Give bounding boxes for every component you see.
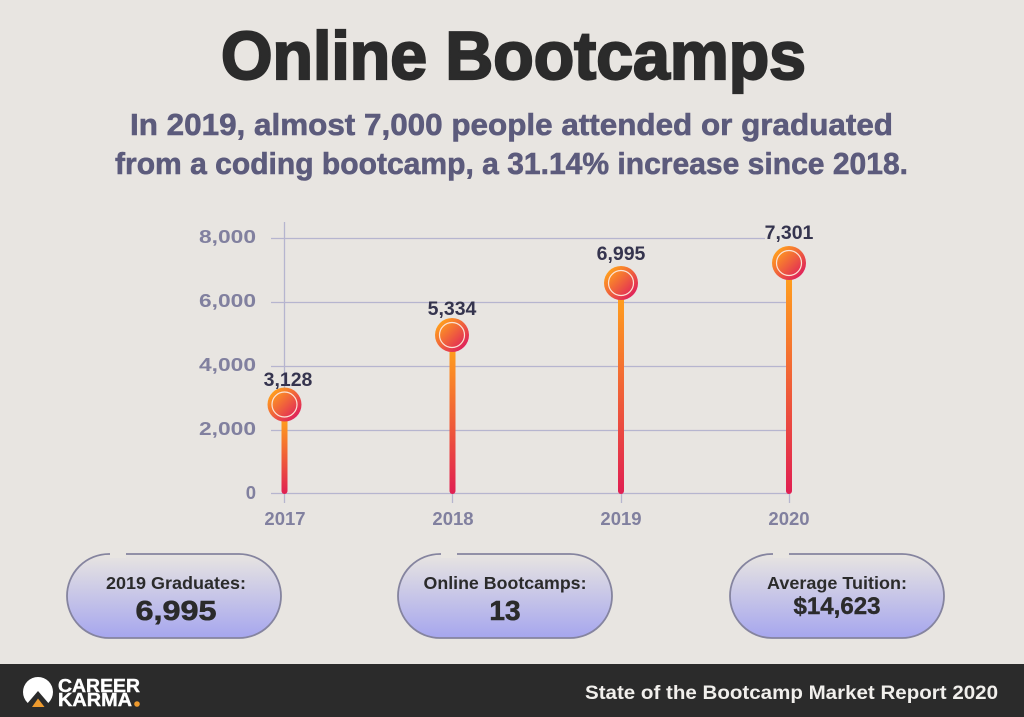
stat pill: online bootcamps — [398, 550, 612, 638]
data point: 2020: 7,301 — [765, 222, 814, 244]
data point: 2017 — [264, 369, 313, 491]
stat pill: online bootcamps: 13 — [489, 595, 521, 626]
y axis labels: 8,000 — [199, 226, 256, 247]
y axis labels — [199, 226, 256, 503]
line chart: online bootcamp attendance by year — [199, 222, 814, 529]
x axis labels — [264, 508, 810, 529]
logo: Career Karma: KARMA — [58, 690, 132, 710]
data point: 2020 — [765, 222, 814, 491]
footer bar — [0, 664, 1024, 717]
y axis labels: 6,000 — [199, 290, 256, 311]
subtitle: In 2019, almost 7,000 people attended or graduated — [130, 107, 893, 142]
stat pill: average tuition: $14,623 — [794, 593, 880, 620]
y axis labels: 0 — [246, 482, 256, 503]
stat pill: online bootcamps: Online Bootcamps: — [424, 573, 586, 593]
title: Online Bootcamps — [221, 18, 806, 94]
stat pill: 2019 graduates — [67, 550, 281, 638]
y axis labels: 2,000 — [199, 418, 256, 439]
stat pill: average tuition — [730, 550, 944, 638]
chart gridlines and axes — [271, 222, 790, 503]
x axis labels: 2019 — [600, 508, 642, 529]
stat pill: 2019 graduates: 2019 Graduates: — [106, 573, 246, 593]
x axis labels: 2018 — [432, 508, 474, 529]
data point: 2017: 3,128 — [264, 369, 313, 391]
logo: Career Karma — [20, 676, 140, 712]
data point: 2018: 5,334 — [428, 298, 477, 320]
data point: 2019 — [597, 243, 646, 491]
y axis labels: 4,000 — [199, 354, 256, 375]
logo: Career Karma: CAREER — [58, 676, 140, 696]
x axis labels: 2017 — [264, 508, 306, 529]
x axis labels: 2020 — [768, 508, 810, 529]
footer source text: State of the Bootcamp Market Report 2020 — [585, 683, 998, 704]
subtitle — [115, 107, 908, 181]
data point: 2018 — [428, 298, 477, 491]
stat pill: average tuition: Average Tuition: — [767, 573, 907, 593]
data point: 2019: 6,995 — [597, 243, 646, 265]
subtitle: from a coding bootcamp, a 31.14% increase since 2018. — [115, 146, 908, 181]
icon: mountain sun — [20, 677, 56, 712]
stat pill: 2019 graduates: 6,995 — [136, 595, 216, 626]
